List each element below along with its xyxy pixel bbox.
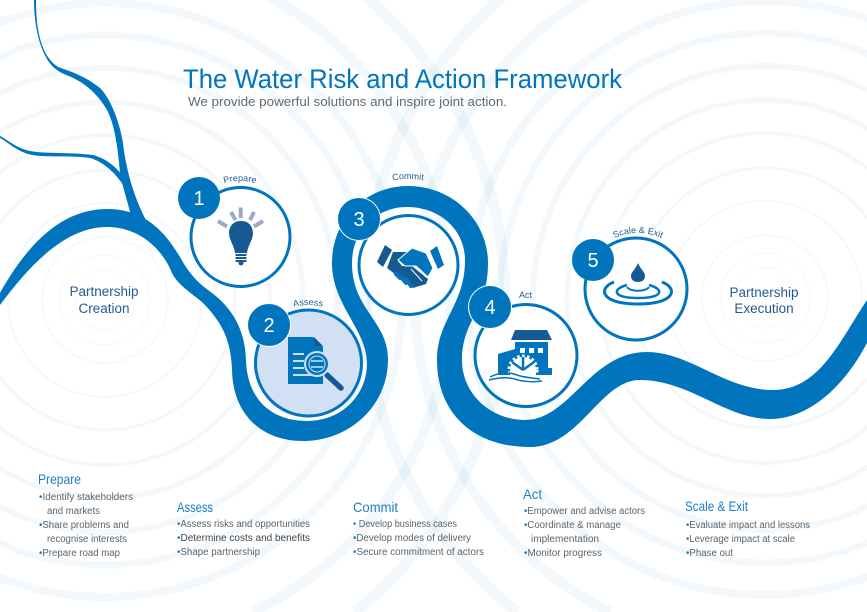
text block: assess: •Shape partnership xyxy=(177,547,260,558)
partnership execution label: Partnership xyxy=(729,285,799,300)
text block: scale and exit: •Leverage impact at scale xyxy=(686,534,795,545)
text block: prepare xyxy=(38,471,133,559)
label: scale and exit: Scale & Exit xyxy=(613,226,664,238)
icon: water drop with ripples xyxy=(605,263,671,304)
text block: assess: •Assess risks and opportunities xyxy=(177,519,310,530)
river with tributaries xyxy=(0,0,867,447)
text block: act: Act xyxy=(523,486,542,502)
partnership creation label xyxy=(69,284,139,316)
icon: document with magnifier xyxy=(288,337,341,388)
text block: commit xyxy=(353,499,484,558)
title: The Water Risk and Action Framework xyxy=(183,64,623,94)
text block: commit: • Develop business cases xyxy=(353,519,457,530)
text block: scale and exit xyxy=(685,498,810,559)
step 2: assess xyxy=(248,300,363,418)
badge 2: 2 xyxy=(263,315,275,337)
text block: commit: •Develop modes of delivery xyxy=(353,533,471,544)
step 1: prepare xyxy=(178,176,292,288)
subtitle: We provide powerful solutions and inspire joint action. xyxy=(188,94,507,109)
text block: prepare: •Prepare road map xyxy=(39,548,120,559)
label: prepare: Prepare xyxy=(223,176,256,184)
icon: water mill xyxy=(489,330,552,385)
partnership creation label: Partnership xyxy=(69,284,139,299)
text block: scale and exit: •Phase out xyxy=(686,548,733,559)
text block: act: •Coordinate & manage xyxy=(524,520,621,531)
text block: act xyxy=(523,486,645,559)
label: assess: Assess xyxy=(294,300,323,307)
text block: assess xyxy=(177,499,310,558)
text block: commit: Commit xyxy=(353,499,398,515)
badge 1: 1 xyxy=(193,188,205,210)
text block: act: •Monitor progress xyxy=(524,548,602,559)
text block: scale and exit: •Evaluate impact and lessons xyxy=(686,520,810,531)
text block: act: •Empower and advise actors xyxy=(524,506,645,517)
icon: light bulb xyxy=(218,208,263,266)
badge 3 xyxy=(338,198,380,240)
icon: handshake xyxy=(377,245,444,288)
label: commit: Commit xyxy=(392,173,424,180)
text block: prepare: •Share problems and xyxy=(39,520,129,531)
text block: scale and exit: Scale & Exit xyxy=(685,498,748,514)
badge 4: 4 xyxy=(484,297,496,319)
text block: assess: Assess xyxy=(177,499,213,515)
partnership creation label: Creation xyxy=(78,301,130,316)
badge 5: 5 xyxy=(587,250,599,272)
badge 3: 3 xyxy=(353,209,365,231)
text block: prepare: •Identify stakeholders xyxy=(39,492,133,503)
text block: assess: •Determine costs and benefits xyxy=(177,533,310,544)
step 4: act xyxy=(468,286,577,406)
text block: commit: •Secure commitment of actors xyxy=(353,547,484,558)
partnership execution label: Execution xyxy=(734,301,794,316)
text block: prepare: Prepare xyxy=(38,471,81,487)
text block: prepare: and markets xyxy=(47,506,100,517)
label: act: Act xyxy=(519,290,533,300)
partnership execution label xyxy=(729,285,799,316)
step 3: commit xyxy=(338,173,460,316)
step 5: scale and exit xyxy=(572,226,688,342)
text block: act: implementation xyxy=(531,534,599,545)
text block: prepare: recognise interests xyxy=(47,534,127,545)
